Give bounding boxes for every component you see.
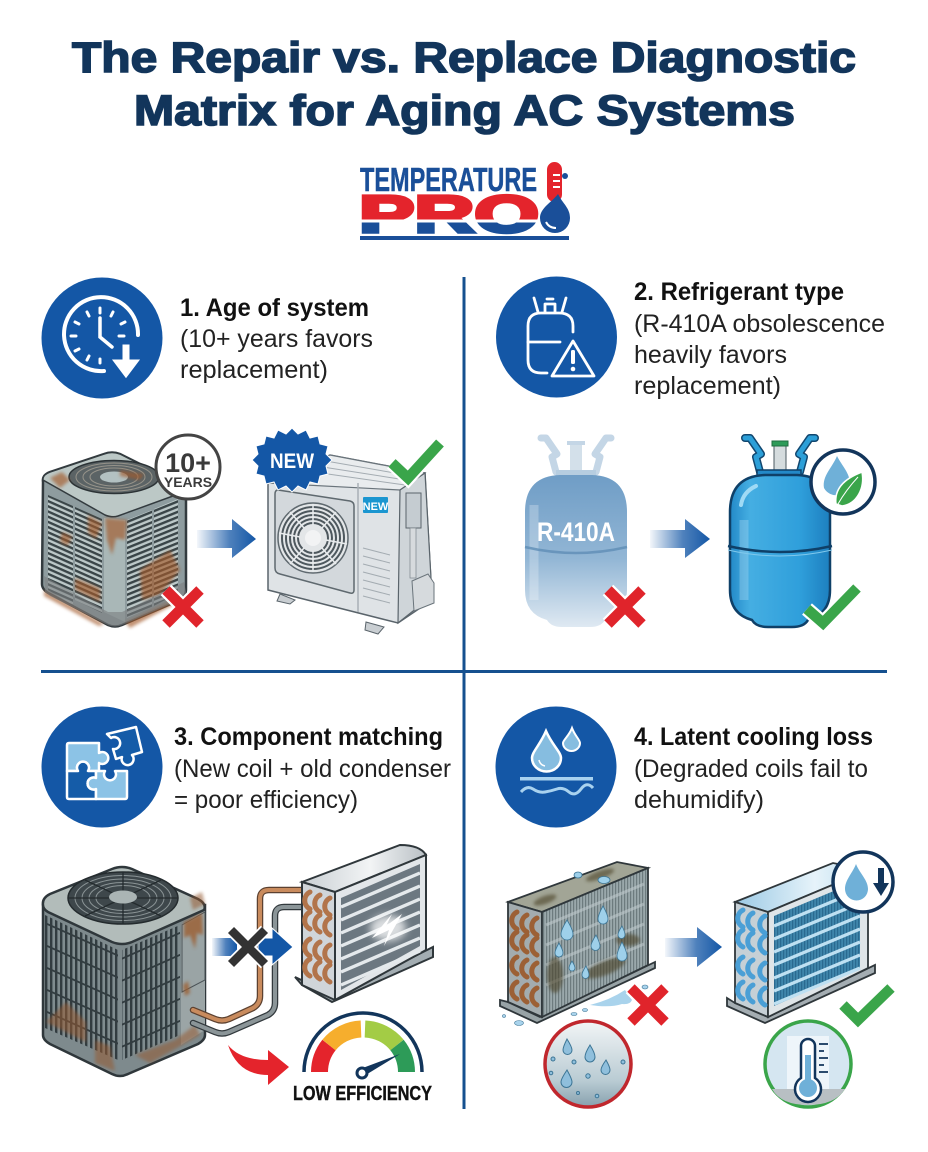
icon: red x bbox=[608, 590, 642, 624]
logo: Temperature Pro bbox=[359, 161, 570, 244]
badge: eco drop and leaf bbox=[811, 450, 875, 514]
panel: component matching bbox=[42, 706, 451, 1105]
chart: low efficiency gauge bbox=[293, 1013, 433, 1105]
badge: 10+ years bbox=[156, 435, 220, 499]
icon: red x bbox=[166, 590, 200, 624]
illustration: new outdoor unit bbox=[268, 455, 434, 634]
logo: Temperature Pro: TEMPERATURE bbox=[360, 161, 537, 198]
logo: Temperature Pro: PRO bbox=[359, 186, 539, 244]
icon: puzzle pieces bbox=[42, 706, 162, 828]
inset: clean thermometer bbox=[765, 1021, 851, 1107]
title: Matrix for Aging AC Systems bbox=[134, 87, 795, 135]
heading and note: component matching: 3. Component matching bbox=[174, 723, 443, 751]
icon: tank with warning bbox=[496, 276, 617, 398]
heading and note: latent cooling: (Degraded coils fail to bbox=[634, 755, 868, 783]
illustration: copper and gray line set bbox=[193, 890, 302, 1034]
heading and note: refrigerant: (R-410A obsolescence bbox=[634, 310, 885, 338]
heading and note: refrigerant: replacement) bbox=[634, 372, 781, 400]
heading and note: age bbox=[180, 294, 373, 384]
title bbox=[72, 34, 856, 135]
icon: red x bbox=[631, 988, 665, 1022]
heading and note: component matching bbox=[174, 723, 451, 814]
badge: 10+ years: 10+ bbox=[165, 448, 211, 478]
heading and note: refrigerant bbox=[634, 278, 885, 400]
arrow bbox=[665, 927, 722, 967]
heading and note: refrigerant: heavily favors bbox=[634, 341, 787, 369]
icon: green check bbox=[807, 588, 857, 623]
illustration: faded R-410A cylinder bbox=[525, 438, 627, 627]
heading and note: age: replacement) bbox=[180, 356, 328, 384]
badge: 10+ years: YEARS bbox=[164, 474, 212, 490]
icon: green check bbox=[843, 988, 891, 1020]
illustration: old rusty condenser bbox=[42, 452, 186, 628]
arrow bbox=[650, 519, 710, 558]
illustration: new outdoor unit: NEW bbox=[363, 501, 389, 513]
badge: humidity down bbox=[833, 852, 893, 912]
illustration: new blue cylinder bbox=[728, 438, 832, 627]
inset: wet surface bbox=[545, 1021, 631, 1107]
panel: latent cooling loss bbox=[496, 706, 893, 1107]
heading and note: latent cooling bbox=[634, 723, 873, 814]
arrow: mismatch blocked bbox=[212, 928, 293, 965]
chart: low efficiency gauge: LOW EFFICIENCY bbox=[293, 1083, 433, 1105]
heading and note: refrigerant: 2. Refrigerant type bbox=[634, 278, 844, 306]
title: The Repair vs. Replace Diagnostic bbox=[72, 34, 856, 82]
illustration: new indoor coil bbox=[295, 845, 433, 1002]
heading and note: age: (10+ years favors bbox=[180, 325, 373, 353]
arrow bbox=[197, 519, 256, 558]
quadrant dividers bbox=[41, 277, 887, 1109]
icon: green check bbox=[392, 443, 440, 478]
illustration: faded R-410A cylinder: R-410A bbox=[537, 517, 615, 547]
badge: new starburst: NEW bbox=[270, 450, 314, 473]
arrow: red curved bbox=[228, 1045, 289, 1085]
illustration: aged condenser bbox=[43, 867, 205, 1076]
icon: clock with down arrow bbox=[42, 278, 162, 398]
panel: age of system bbox=[42, 278, 440, 634]
illustration: degraded wet coil bbox=[500, 862, 655, 1026]
heading and note: component matching: (New coil + old condenser bbox=[174, 755, 451, 783]
illustration: clean coil bbox=[727, 863, 875, 1023]
heading and note: latent cooling: 4. Latent cooling loss bbox=[634, 723, 873, 751]
heading and note: latent cooling: dehumidify) bbox=[634, 786, 764, 814]
badge: new starburst bbox=[252, 428, 332, 492]
panel: refrigerant type bbox=[496, 276, 885, 627]
heading and note: age: 1. Age of system bbox=[180, 294, 369, 322]
icon: water drops bbox=[496, 706, 616, 828]
heading and note: component matching: = poor efficiency) bbox=[174, 786, 358, 814]
